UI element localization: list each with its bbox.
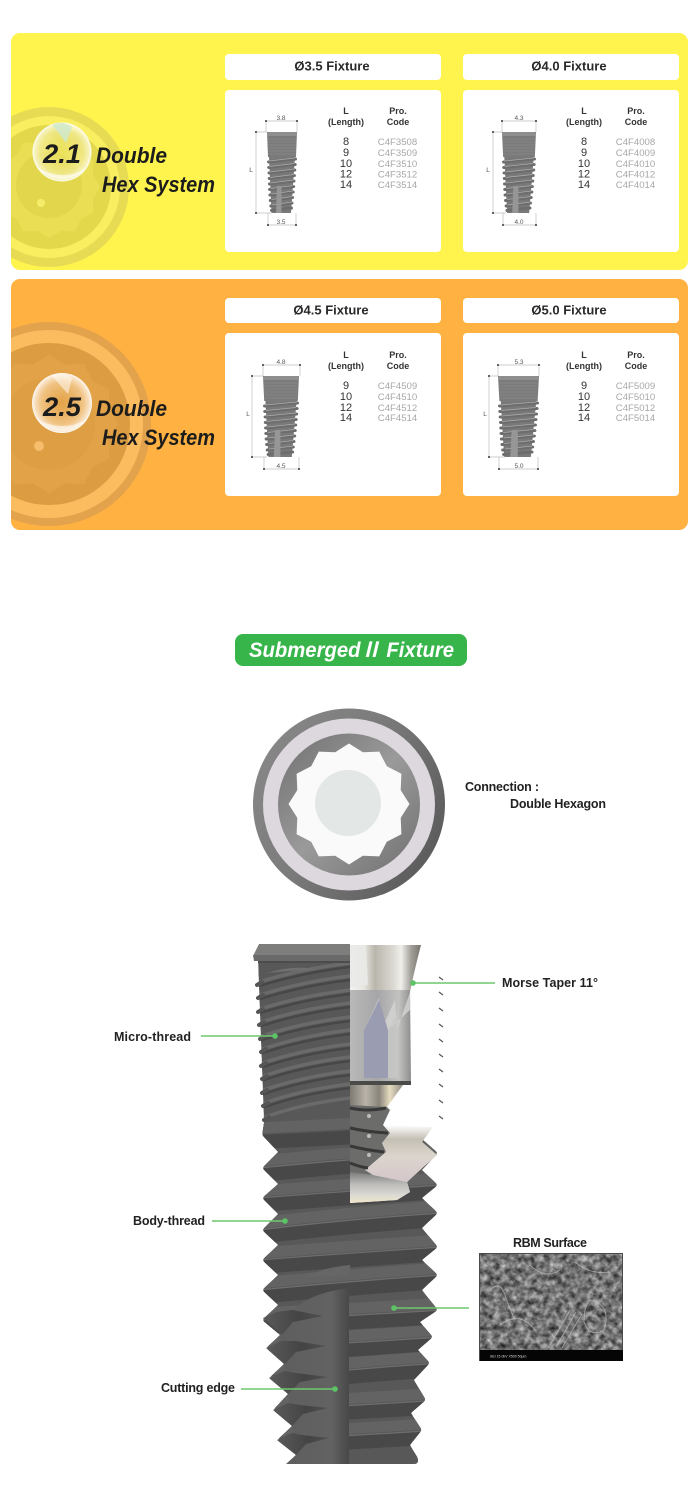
diagram: 4.0 fixture dimensions [486,115,537,226]
table: 4.0 fixture lengths and codes: C4F4008 [616,137,655,148]
table: 3.5 fixture lengths and codes: 10 [340,158,352,170]
table: 4.5 fixture lengths and codes: C4F4510 [378,392,417,403]
callout: rbm surface line [391,1305,469,1311]
diagram: 4.0 fixture dimensions: 4.3 [514,115,524,122]
table: 5.0 fixture lengths and codes [566,350,656,424]
title tab: 5.0 fixture: Ø5.0 Fixture [531,302,607,318]
card: 5.0 fixture [463,333,679,496]
heading: rbm surface: RBM Surface [513,1236,587,1250]
diagram: 4.0 fixture dimensions: 4.0 [514,219,524,226]
image: rbm surface micrograph: SEI 15.0kV X500 50μm [490,1354,527,1358]
heading: submerged II fixture [235,634,467,666]
callout: morse taper [410,976,598,990]
callout: body-thread: Body-thread [133,1214,205,1228]
icon: bubble 2.1 [32,122,92,182]
table: 3.5 fixture lengths and codes: C4F3510 [378,159,417,170]
diagram: 5.0 fixture dimensions: 5.3 [514,359,524,366]
heading: double hex system: Double [96,143,167,168]
heading: double hex system [96,396,215,450]
icon: bubble 2.5 [32,373,92,433]
table: 3.5 fixture lengths and codes: C4F3509 [378,148,417,159]
icon: connection top view watermark [0,322,151,526]
table: 4.5 fixture lengths and codes: 14 [340,412,352,424]
table: 5.0 fixture lengths and codes: 14 [578,412,590,424]
heading: 2.1: 2.1 [42,139,81,169]
morse taper socket [350,945,421,1081]
table: 4.0 fixture lengths and codes: C4F4014 [616,180,656,191]
callout: cutting edge [161,1381,338,1395]
table: 5.0 fixture lengths and codes: 12 [578,402,590,414]
callout: micro-thread [114,1030,278,1044]
table: 4.5 fixture lengths and codes: (Length) [328,361,364,371]
internal threads [350,1105,390,1175]
table: 4.0 fixture lengths and codes: Pro. [627,106,645,116]
table: 5.0 fixture lengths and codes: Code [625,361,647,371]
table: 4.0 fixture lengths and codes: (Length) [566,117,602,127]
table: 3.5 fixture lengths and codes [328,106,418,191]
callout: cutting edge: Cutting edge [161,1381,235,1395]
table: 4.5 fixture lengths and codes: C4F4509 [378,381,417,392]
diagram: double hexagon top view [253,708,445,900]
diagram: 4.5 fixture dimensions [246,359,301,470]
table: 4.5 fixture lengths and codes: Pro. [389,350,407,360]
table: 4.5 fixture lengths and codes: 12 [340,402,352,414]
table: 4.0 fixture lengths and codes: C4F4012 [616,170,655,180]
diagram: 4.5 fixture dimensions: L [246,411,250,418]
wall thread ticks [439,977,443,1119]
table: 4.0 fixture lengths and codes: 9 [581,147,587,159]
label: connection double hexagon: Double Hexagon [510,797,606,811]
table: 4.5 fixture lengths and codes: 9 [343,380,349,392]
table: 5.0 fixture lengths and codes: 10 [578,391,590,403]
title tab: 3.5 fixture: Ø3.5 Fixture [294,58,370,74]
diagram: 3.5 fixture dimensions: 3.8 [276,115,286,122]
table: 4.0 fixture lengths and codes: 10 [578,158,590,170]
card: 4.5 fixture [225,333,441,496]
diagram: 4.0 fixture dimensions: L [486,167,490,174]
heading: double hex system [96,143,215,197]
micro-thread scallops [257,982,269,1120]
icon: connection top view watermark [0,107,129,267]
title tab: 4.0 fixture: Ø4.0 Fixture [531,58,607,74]
callout: micro-thread: Micro-thread [114,1030,191,1044]
diagram: 3.5 fixture dimensions [249,115,298,226]
table: 4.5 fixture lengths and codes: L [343,350,349,360]
table: 4.5 fixture lengths and codes: Code [387,361,409,371]
title tab: 4.0 fixture [463,54,679,80]
table: 3.5 fixture lengths and codes: 9 [343,147,349,159]
table: 5.0 fixture lengths and codes: Pro. [627,350,645,360]
table: 3.5 fixture lengths and codes: (Length) [328,117,364,127]
table: 4.0 fixture lengths and codes: 12 [578,168,590,180]
title tab: 4.5 fixture: Ø4.5 Fixture [293,302,369,318]
diagram: 3.5 fixture dimensions: L [249,167,253,174]
bottom bowl [350,1172,410,1203]
image: rbm surface micrograph [479,1253,623,1361]
card: 3.5 fixture [225,90,441,252]
table: 4.0 fixture lengths and codes: C4F4010 [616,159,655,170]
table: 5.0 fixture lengths and codes: (Length) [566,361,602,371]
panel: 2.5 double hex system [0,279,688,530]
label: connection double hexagon: Connection : [465,780,539,794]
table: 4.0 fixture lengths and codes: L [581,106,587,116]
table: 3.5 fixture lengths and codes: 8 [343,136,349,148]
table: 3.5 fixture lengths and codes: C4F3514 [378,180,418,191]
table: 3.5 fixture lengths and codes: C4F3512 [378,170,417,180]
table: 5.0 fixture lengths and codes: C4F5009 [616,381,655,392]
title tab: 5.0 fixture [463,298,679,323]
table: 5.0 fixture lengths and codes: C4F5012 [616,403,655,414]
heading: double hex system: Double [96,396,167,421]
wall section shading [365,1125,437,1182]
panel: 2.1 double hex system [0,33,688,270]
table: 4.0 fixture lengths and codes [566,106,656,191]
callout: morse taper: Morse Taper 11° [502,976,598,990]
cutaway wall [350,944,443,1203]
heading: submerged II fixture: SubmergedⅡ Fixture [249,639,454,662]
diagram: 4.5 fixture dimensions: 4.8 [276,359,286,366]
cutting edge flute [263,1288,349,1464]
heading: double hex system: Hex System [102,172,215,197]
diagram: 5.0 fixture dimensions: L [483,411,487,418]
table: 5.0 fixture lengths and codes: C4F5010 [616,392,655,403]
diagram: 5.0 fixture dimensions [483,359,540,470]
callout: body-thread [133,1214,288,1228]
diagram: 5.0 fixture dimensions: 5.0 [514,463,524,470]
table: 4.5 fixture lengths and codes: C4F4512 [378,403,417,414]
table: 3.5 fixture lengths and codes: Code [387,117,409,127]
label: connection double hexagon [465,780,606,811]
implant body and threads [258,963,437,1464]
table: 5.0 fixture lengths and codes: 9 [581,380,587,392]
table: 3.5 fixture lengths and codes: Pro. [389,106,407,116]
table: 4.5 fixture lengths and codes [328,350,418,424]
heading: double hex system: Hex System [102,425,215,450]
title tab: 3.5 fixture [225,54,441,80]
card: 4.0 fixture [463,90,679,252]
implant collar [253,944,350,973]
table: 3.5 fixture lengths and codes: 12 [340,168,352,180]
table: 4.0 fixture lengths and codes: 8 [581,136,587,148]
table: 3.5 fixture lengths and codes: C4F3508 [378,137,417,148]
cone [350,1085,403,1107]
diagram: 4.5 fixture dimensions: 4.5 [276,463,286,470]
table: 4.0 fixture lengths and codes: C4F4009 [616,148,655,159]
table: 4.0 fixture lengths and codes: Code [625,117,647,127]
table: 5.0 fixture lengths and codes: L [581,350,587,360]
table: 5.0 fixture lengths and codes: C4F5014 [616,413,656,424]
diagram: implant fixture cutaway [250,944,450,1470]
table: 4.5 fixture lengths and codes: 10 [340,391,352,403]
table: 4.0 fixture lengths and codes: 14 [578,179,590,191]
table: 3.5 fixture lengths and codes: 14 [340,179,352,191]
title tab: 4.5 fixture [225,298,441,323]
table: 3.5 fixture lengths and codes: L [343,106,349,116]
heading: 2.5: 2.5 [42,392,82,422]
diagram: 3.5 fixture dimensions: 3.5 [276,219,286,226]
taper seat band [350,1081,411,1085]
table: 4.5 fixture lengths and codes: C4F4514 [378,413,418,424]
